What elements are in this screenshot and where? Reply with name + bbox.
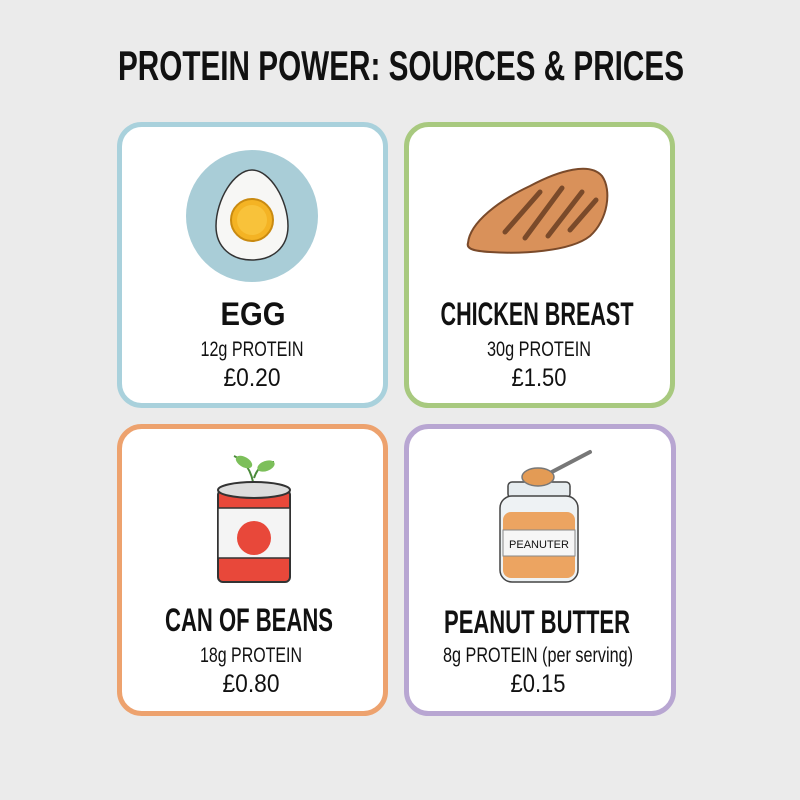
text: chicken price: £1.50	[512, 364, 566, 392]
panel: egg	[120, 124, 386, 406]
panel: beans	[120, 426, 386, 714]
text: chicken name: CHICKEN BREAST	[440, 296, 634, 332]
text: peanut name: PEANUT BUTTER	[444, 604, 630, 640]
icon: can	[218, 453, 290, 582]
panel: chicken	[406, 124, 672, 406]
text: beans price: £0.80	[222, 670, 280, 698]
text: chicken protein: 30g PROTEIN	[487, 338, 591, 361]
text: egg name: EGG	[220, 296, 286, 332]
text: beans name: CAN OF BEANS	[165, 602, 333, 638]
icon: egg	[186, 150, 318, 282]
icon: chicken breast	[468, 169, 607, 253]
text: peanut protein: 8g PROTEIN (per serving)	[443, 644, 633, 667]
text: beans protein: 18g PROTEIN	[200, 644, 302, 667]
text: peanut price: £0.15	[510, 670, 566, 698]
text: egg protein: 12g PROTEIN	[200, 338, 304, 361]
icon: jar	[500, 452, 590, 582]
panel: peanut butter	[406, 426, 674, 714]
icon: jar: PEANUTER	[509, 539, 569, 551]
text: egg price: £0.20	[224, 364, 280, 392]
